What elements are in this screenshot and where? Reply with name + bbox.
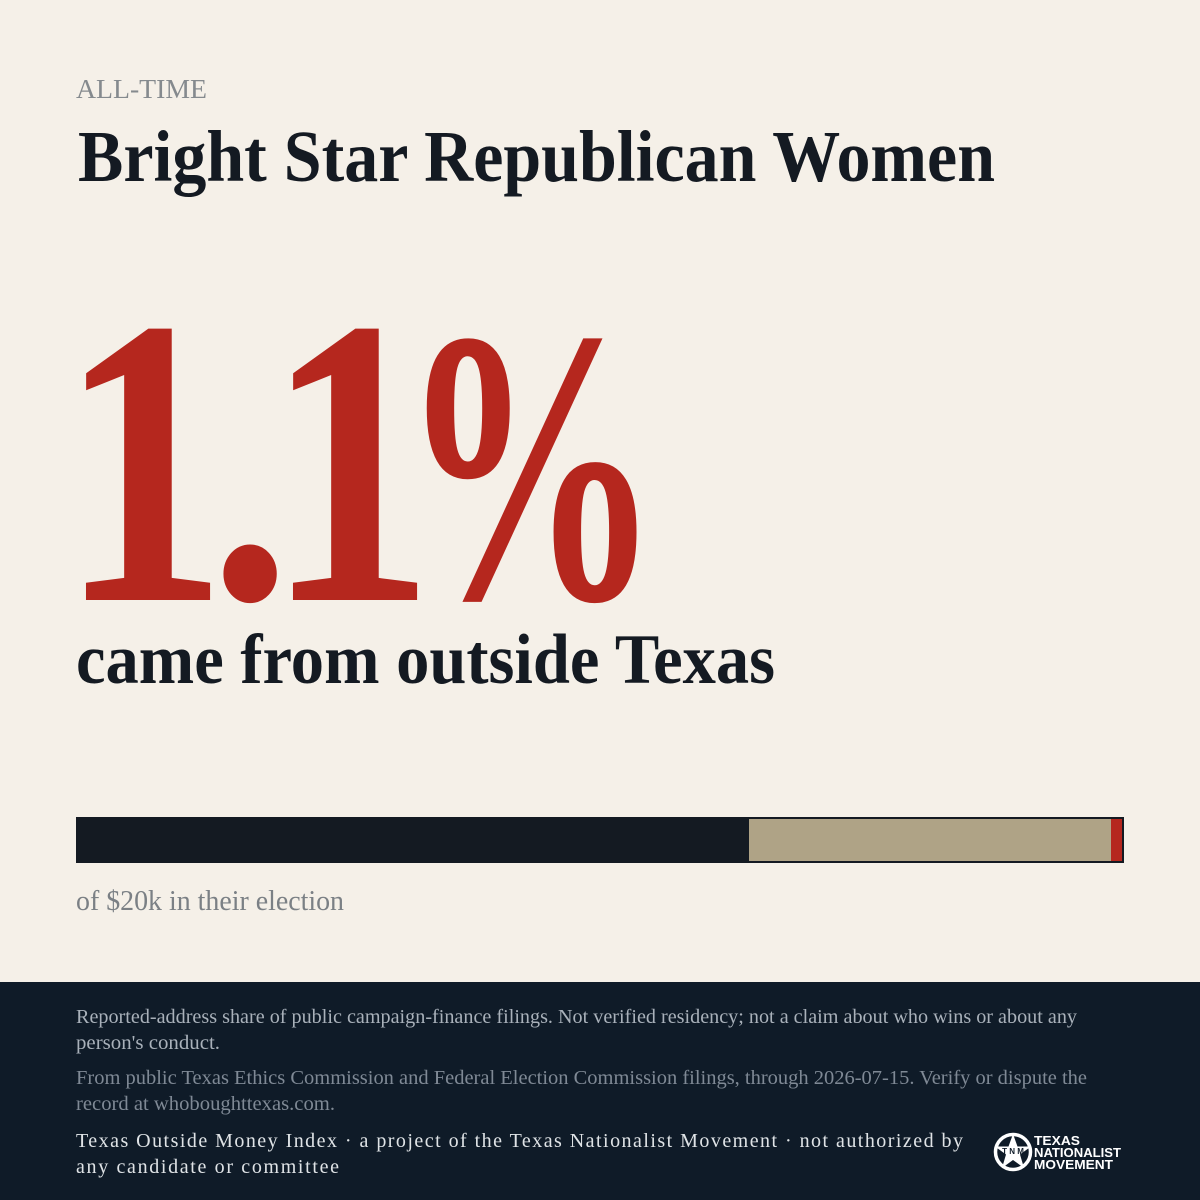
subheading: came from outside Texas — [76, 621, 775, 699]
bar segment: rest of Texas share — [749, 819, 1111, 861]
footer panel — [0, 982, 1200, 1200]
footer: disclaimer — [76, 1006, 1077, 1054]
logo: Texas Nationalist Movement — [995, 1133, 1121, 1172]
footer: attribution: any candidate or committee — [76, 1156, 339, 1178]
footer: sources — [76, 1067, 1087, 1115]
big number: 1.1%: 1 — [59, 235, 228, 690]
big number: 1.1%: . — [209, 276, 291, 676]
eyebrow: time range: ALL-TIME — [76, 74, 207, 104]
logo wordmark: NATIONALIST — [1034, 1145, 1121, 1160]
icon: star in ring: T N M — [1002, 1147, 1024, 1156]
footer: sources: From public Texas Ethics Commission and Federal Election Commission filings, through 2026-07-15. Verify or dispute the — [76, 1067, 1087, 1089]
logo wordmark — [1034, 1133, 1121, 1172]
logo wordmark: MOVEMENT — [1034, 1157, 1113, 1172]
big number: 1.1%: % — [400, 250, 661, 683]
logo wordmark: TEXAS — [1034, 1133, 1080, 1148]
bar caption: of $20k in their election — [76, 886, 344, 917]
bar segment: frame and in-district share — [76, 817, 1124, 863]
footer: attribution: Texas Outside Money Index · a project of the Texas Nationalist Movement · not authorized by — [76, 1130, 963, 1152]
footer: disclaimer: person's conduct. — [76, 1032, 220, 1054]
title: Bright Star Republican Women — [78, 116, 995, 197]
footer: attribution — [76, 1130, 963, 1178]
big number: 1.1%: 1 — [266, 235, 435, 690]
big number: 1.1% — [59, 235, 661, 690]
footer: disclaimer: Reported-address share of public campaign-finance filings. Not verified residency; not a claim about who wins or about any — [76, 1006, 1077, 1028]
stacked share bar — [76, 817, 1124, 863]
bar segment: outside Texas share — [1111, 819, 1122, 861]
footer: sources: record at whoboughttexas.com. — [76, 1093, 335, 1115]
